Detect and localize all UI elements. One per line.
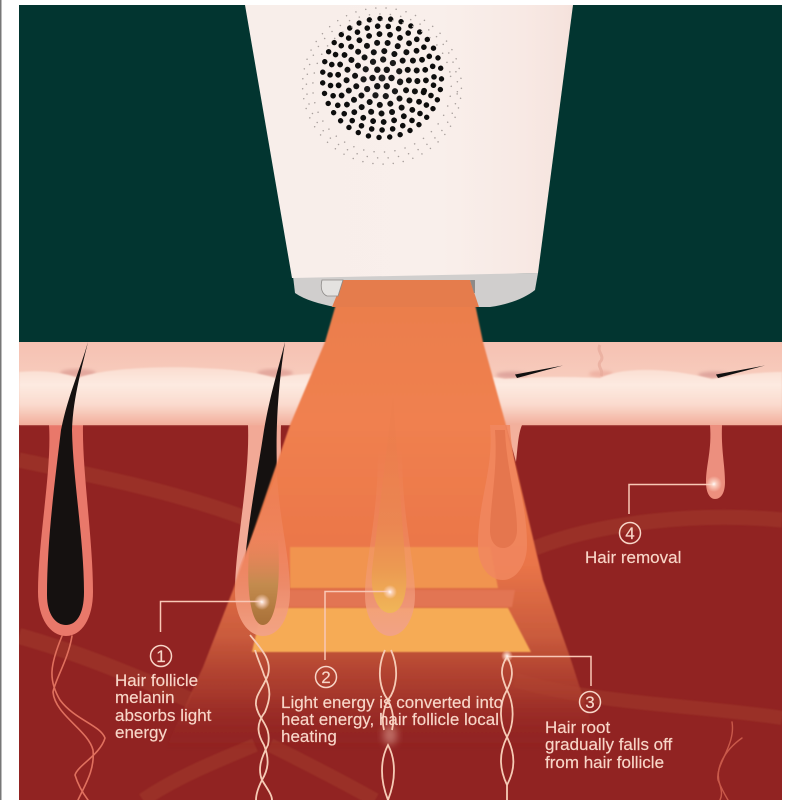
black hair shaft, follicle 1 bbox=[47, 342, 88, 625]
callout 2 bbox=[281, 585, 508, 746]
text 3: from hair follicle bbox=[545, 753, 664, 772]
icon: speaker vent dots bbox=[320, 16, 444, 140]
number 1: 1 bbox=[156, 647, 166, 666]
leader line 3 bbox=[507, 656, 591, 686]
heat bands bbox=[252, 547, 531, 652]
glow point 2 bbox=[383, 585, 397, 599]
tissue streaks bbox=[19, 460, 782, 800]
text 2: heat energy, hair follicle local bbox=[281, 710, 499, 729]
root strands: twisted helices bbox=[250, 635, 513, 800]
short stub hairs bbox=[515, 366, 765, 378]
device: handset bbox=[245, 0, 573, 307]
faint mark on skin bbox=[599, 345, 602, 376]
callout 3 bbox=[501, 650, 677, 772]
follicle 2 sheath bbox=[235, 425, 281, 586]
text 1: absorbs light bbox=[115, 706, 212, 725]
helix under follicle 3 bbox=[380, 650, 396, 800]
number 2: 2 bbox=[321, 668, 331, 687]
follicle 5 remnant bbox=[706, 425, 725, 499]
hair roots bbox=[52, 636, 742, 800]
number 3 bbox=[580, 692, 600, 712]
number 2 bbox=[316, 666, 336, 688]
beam window bbox=[332, 280, 479, 307]
text 4: Hair removal bbox=[585, 548, 681, 567]
follicle 2 bulb bbox=[235, 473, 290, 636]
text 2: Light energy is converted into bbox=[281, 693, 503, 712]
leader line 4 bbox=[629, 484, 714, 514]
mist on root 3 bbox=[383, 725, 397, 745]
dark green background bbox=[19, 5, 782, 343]
black hair shaft, follicle 2 bbox=[245, 342, 285, 560]
number 4: 4 bbox=[625, 524, 635, 543]
callout 1 bbox=[115, 594, 270, 742]
text 3: gradually falls off bbox=[545, 735, 673, 754]
callout 4 bbox=[585, 476, 722, 567]
number 1 bbox=[150, 646, 172, 666]
follicle 4 emptied bbox=[478, 425, 527, 580]
text 3: Hair root bbox=[545, 718, 610, 737]
glow point 4 bbox=[706, 476, 722, 492]
glow point 1 bbox=[254, 594, 270, 610]
follicle 4 neck bbox=[506, 425, 522, 462]
dermis layer bbox=[19, 425, 782, 800]
text 1: Hair follicle bbox=[115, 671, 198, 690]
icon: faint outer perforations bbox=[302, 7, 462, 165]
light beam bbox=[183, 307, 588, 716]
white body bbox=[245, 5, 573, 278]
glow point 3 bbox=[501, 650, 513, 662]
root strands: left follicle bbox=[52, 636, 105, 800]
helix under follicle 4 bbox=[501, 657, 513, 800]
text 1: melanin bbox=[115, 688, 175, 707]
leader line 2 bbox=[325, 592, 390, 660]
skin layer bbox=[19, 342, 782, 425]
skin dip shadows bbox=[60, 369, 730, 378]
silver base bbox=[293, 273, 538, 307]
follicle 3 heated bbox=[365, 495, 415, 636]
text 2: heating bbox=[281, 727, 337, 746]
helix under follicle 2 bbox=[250, 635, 272, 800]
leader line 1 bbox=[160, 602, 262, 632]
number 3: 3 bbox=[585, 693, 595, 712]
lighter scalloped skin surface bbox=[19, 367, 782, 425]
page edge strip bbox=[0, 0, 2, 800]
root strands: far right faint bbox=[718, 722, 742, 800]
text 1: energy bbox=[115, 723, 167, 742]
follicle 1 sheath bbox=[38, 425, 93, 636]
